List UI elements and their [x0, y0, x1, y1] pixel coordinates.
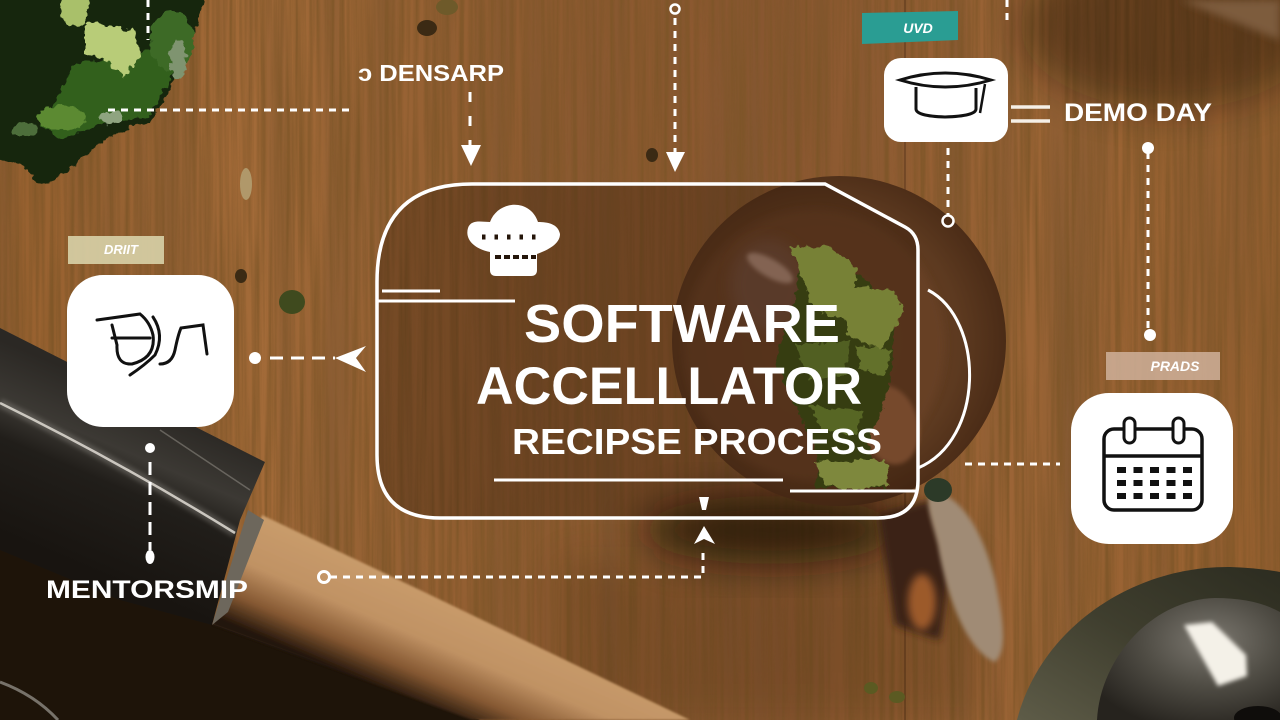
crumbs — [235, 0, 905, 703]
label tag: rose — [1106, 352, 1220, 380]
arrowheads and dots — [145, 4, 1156, 582]
connector: double line — [1011, 107, 1050, 121]
label tag: teal: UVD — [903, 20, 933, 36]
rolling pin edge top right — [1180, 0, 1280, 40]
node: calendar card — [1071, 393, 1233, 544]
label tag: teal — [862, 11, 958, 44]
title: SOFTWARE — [524, 294, 840, 354]
label tag: cream — [68, 236, 164, 264]
dashed connectors — [108, 0, 1148, 577]
label: demo day: DEMO DAY — [1064, 99, 1212, 127]
central recipe panel — [377, 184, 970, 518]
label tag: rose: PRADS — [1150, 358, 1200, 374]
steel bowl and ladle — [1017, 567, 1280, 720]
herb sprig — [775, 246, 904, 490]
rolling pin — [212, 510, 690, 720]
node: graduation cap card — [884, 58, 1008, 142]
node: signature card — [67, 275, 234, 427]
title line two: ACCELLLATOR — [476, 357, 862, 416]
label tag: cream: DRIIT — [104, 242, 139, 257]
wooden bowl with herb — [640, 176, 1006, 564]
greens: top left herbs — [0, 0, 205, 183]
label: mentorship: MENTORSMIP — [46, 576, 248, 604]
label: densarp: ↄ DENSARP — [358, 60, 504, 86]
icon: chef hat — [467, 205, 560, 276]
fabric tassel — [878, 478, 1003, 662]
subtitle: RECIPSE PROCESS — [512, 421, 882, 462]
dark cylinder and shadow — [0, 328, 480, 720]
